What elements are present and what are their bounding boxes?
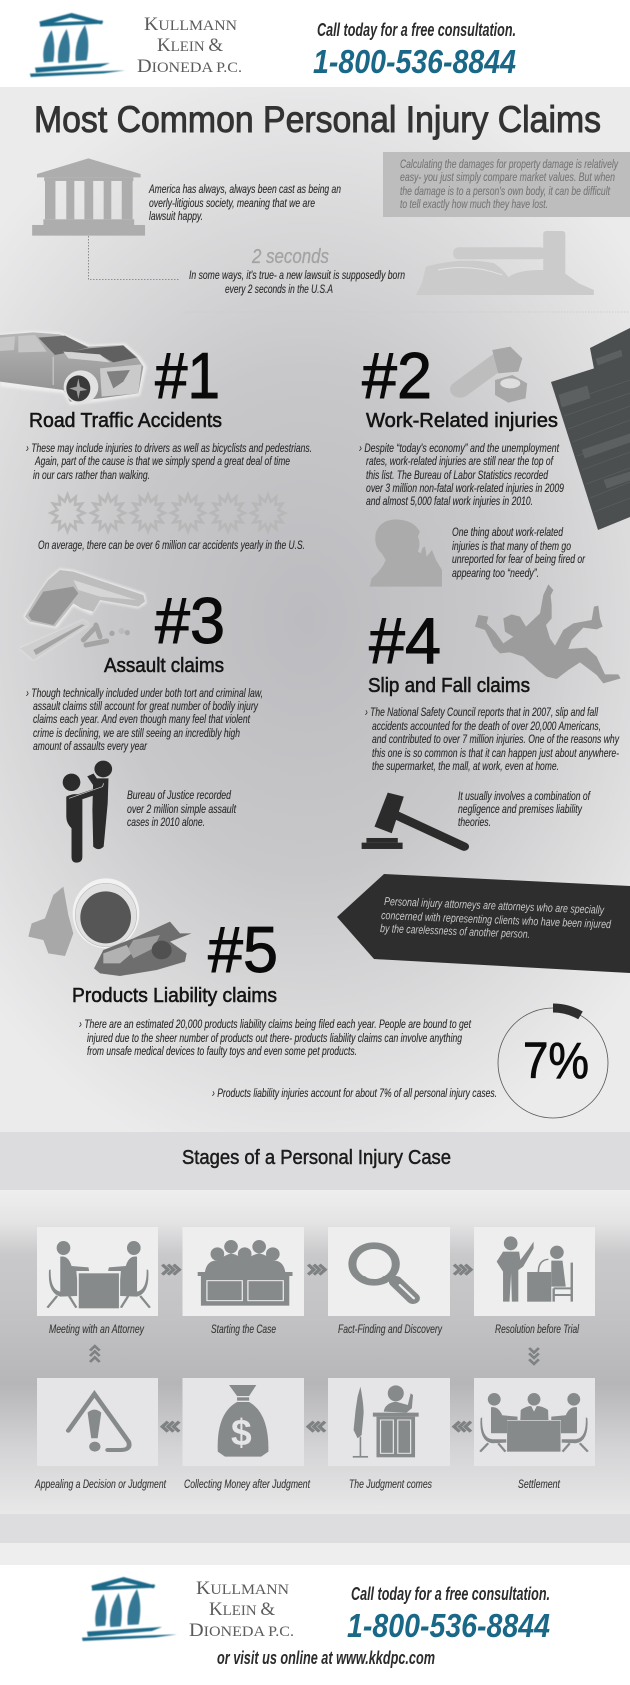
firm name: KLEIN &: [209, 1599, 275, 1620]
stat text: On average, there can be over 6 million car accidents yearly in the U.S.: [38, 540, 305, 552]
stage labels: Starting the Case: [211, 1324, 276, 1336]
icon: warning triangle: [68, 1394, 129, 1452]
firm name: [137, 14, 242, 77]
side note: negligence and premises liability: [458, 804, 583, 816]
header: [30, 13, 516, 80]
stage icons: [47, 1236, 588, 1458]
icon: jury box: [198, 1240, 293, 1306]
section band: stages heading: Stages of a Personal Injury Case: [182, 1147, 451, 1169]
heading: Slip and Fall claims: [368, 675, 530, 697]
firm name: DIONEDA P.C.: [137, 56, 242, 77]
number: #3: [155, 584, 225, 657]
body text: › Though technically included under both tort and criminal law,: [26, 688, 263, 700]
side note: [127, 790, 237, 829]
body text: and almost 5,000 fatal work injuries in 2010.: [366, 496, 533, 508]
stages background: [0, 1190, 630, 1514]
body text: [359, 443, 564, 508]
phone number: 1-800-536-8844: [347, 1607, 550, 1644]
stat: 2 seconds: 2 seconds: [251, 246, 329, 268]
icon: courthouse: [32, 158, 145, 236]
firm name: [189, 1578, 294, 1641]
icon: firm logo: [30, 13, 125, 77]
heading: Road Traffic Accidents: [29, 410, 222, 432]
side note: over 2 million simple assault: [127, 804, 237, 816]
text: lawsuit happy: America has always, always been cast as being an: [148, 184, 341, 196]
text: lawsuit happy: overly-litigious society, meaning that we are: [149, 198, 315, 210]
icon: falling person: [475, 584, 621, 683]
body text: › Despite “today's economy” and the unemployment: [359, 443, 560, 455]
side note: [458, 791, 591, 829]
text: lawsuit every 2 seconds: every 2 seconds in the U.S.A: [225, 284, 333, 296]
body text: › There are an estimated 20,000 products liability claims being filed each year. People are bound to get: [79, 1019, 472, 1031]
stage labels: Fact-Finding and Discovery: [338, 1324, 443, 1336]
number: #5: [208, 913, 278, 986]
firm name: KLEIN &: [157, 35, 223, 56]
website: or visit us online at www.kkdpc.com: [217, 1648, 435, 1668]
body text: [79, 1019, 472, 1058]
text: lawsuit happy: [148, 184, 341, 223]
text: lawsuit every 2 seconds: [189, 270, 405, 296]
stage labels: Collecting Money after Judgment: [184, 1479, 311, 1491]
body text: [365, 707, 620, 773]
body text: this list. The Bureau of Labor Statistics recorded: [366, 470, 548, 482]
side note: One thing about work-related: [452, 527, 563, 539]
stage labels: Settlement: [518, 1479, 561, 1491]
text: lawsuit happy: lawsuit happy.: [149, 211, 203, 223]
panel: #5 products liability claims: [28, 878, 608, 1118]
icon: settlement table: [480, 1393, 588, 1452]
image: consumer products: [28, 878, 192, 976]
stage labels: [34, 1324, 579, 1491]
image: wrecked car: [0, 331, 147, 405]
body text: injured due to the sheer number of products out there- products liability claims can involve anything: [87, 1033, 462, 1045]
stage labels: Meeting with an Attorney: [49, 1324, 145, 1336]
section band: stages heading: [0, 1132, 630, 1190]
callout: arrow banner about attorneys: [337, 874, 630, 973]
body text: [26, 443, 312, 482]
icon: meeting with attorney: [47, 1241, 150, 1308]
footer: [82, 1577, 550, 1668]
body text: the supermarket, the mall, at work, even at home.: [372, 761, 559, 773]
image: pistol and magazine: [20, 568, 147, 660]
stage labels: Resolution before Trial: [495, 1324, 579, 1336]
firm name: KULLMANN: [144, 14, 237, 35]
callout: arrow banner about attorneys: by the carelessness of another person.: [380, 923, 530, 941]
body text: Again, part of the cause is that we simply spend a great deal of time: [34, 456, 290, 468]
heading: Work-Related injuries: [366, 410, 558, 432]
image: injury report forms: [551, 328, 630, 530]
side note: unreported for fear of being fired or: [452, 554, 586, 566]
body text: in our cars rather than walking.: [33, 470, 150, 482]
callout: calculating damages: [383, 152, 630, 217]
icon row: crash stars: [51, 494, 285, 532]
icon: hearing with witness: [497, 1236, 572, 1302]
body text: rates, work-related injuries are still near the top of: [366, 456, 554, 468]
body text: from unsafe medical devices to faulty toys and even some pet products.: [87, 1046, 357, 1058]
card backgrounds: [37, 1227, 595, 1466]
icon: bolt and nut: [460, 347, 527, 403]
icon: money bag: $: [231, 1411, 252, 1453]
icon: magnifying glass: [352, 1246, 414, 1298]
side note: injuries is that many of them go: [452, 541, 571, 553]
stage labels: The Judgment comes: [349, 1479, 432, 1491]
chart: 7% ring: 7%: [523, 1032, 589, 1089]
arrows between stages: [90, 1265, 539, 1432]
body text: crime is declining, we are still seeing an incredibly high: [33, 728, 240, 740]
icon: gavel on book: [416, 231, 594, 295]
body text: [26, 688, 263, 753]
body text: › These may include injuries to drivers as well as bicyclists and pedestrians.: [26, 443, 312, 455]
side note: [452, 527, 586, 580]
number: #2: [362, 339, 432, 412]
icon: firm logo: [82, 1577, 177, 1641]
body text: assault claims still account for great number of bodily injury: [33, 701, 259, 713]
heading: Assault claims: [104, 655, 224, 677]
side note: theories.: [458, 817, 491, 829]
icon: judge at bench: [353, 1385, 419, 1458]
stage labels: Appealing a Decision or Judgment: [34, 1479, 167, 1491]
body text: amount of assaults every year: [33, 741, 148, 753]
side note: appearing too “needy”.: [452, 568, 539, 580]
number: #4: [369, 604, 441, 677]
panel: #3 assault claims: [20, 568, 263, 863]
icon: silent person: [370, 519, 442, 587]
number: #1: [155, 339, 220, 412]
callout: calculating damages: to tell exactly how much they have lost.: [400, 199, 548, 211]
footer band: [0, 1514, 630, 1543]
phone number: 1-800-536-8844: [313, 43, 516, 80]
icon: money bag: [218, 1385, 268, 1457]
panel: stages flow: [34, 1227, 595, 1491]
firm name: DIONEDA P.C.: [189, 1620, 294, 1641]
panel: #1 road traffic accidents: [0, 331, 312, 552]
side note: cases in 2010 alone.: [127, 817, 205, 829]
body text: claims each year. And even though many feel that violent: [33, 714, 251, 726]
text: lawsuit every 2 seconds: In some ways, it's true- a new lawsuit is supposedly born: [189, 270, 405, 282]
stat text: › Products liability injuries account for about 7% of all personal injury cases.: [212, 1088, 497, 1100]
call to action: Call today for a free consultation.: [351, 1584, 550, 1604]
icon: gavel: [362, 793, 464, 849]
firm name: KULLMANN: [196, 1578, 289, 1599]
bottom strip: [0, 1543, 630, 1565]
panel: #2 work-related injuries: [359, 328, 630, 587]
body text: over 3 million non-fatal work-related injuries in 2009: [366, 483, 564, 495]
chart: 7% ring: [498, 1008, 608, 1118]
icon: two people in a scuffle: [63, 761, 112, 863]
panel: #4 slip and fall claims: [362, 584, 621, 849]
side note: Bureau of Justice recorded: [127, 790, 231, 802]
header background: [0, 87, 630, 1132]
heading: Products Liability claims: [72, 985, 277, 1007]
call to action: Call today for a free consultation.: [317, 20, 516, 40]
